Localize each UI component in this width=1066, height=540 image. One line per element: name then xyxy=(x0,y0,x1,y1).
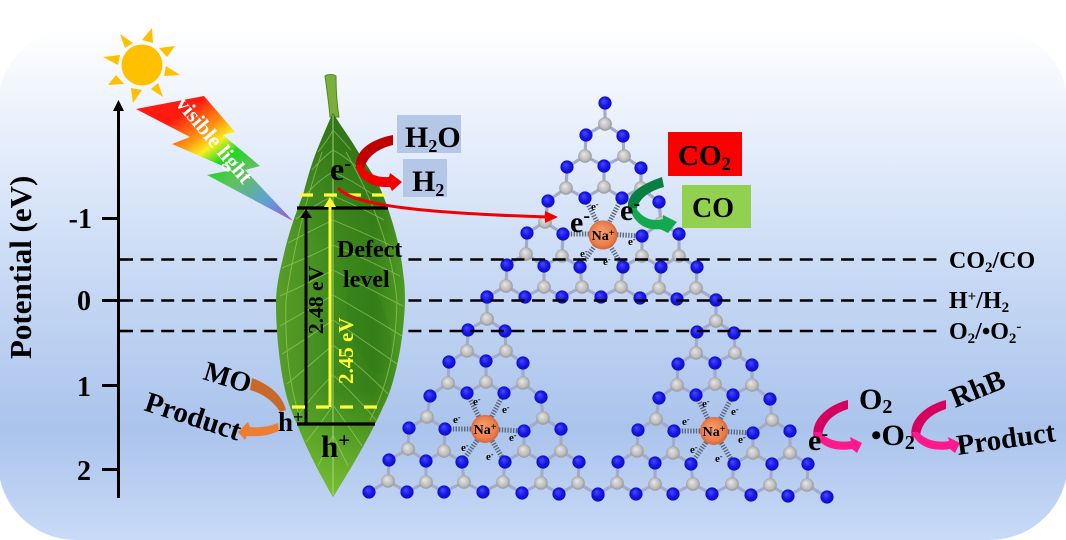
Na ion: top: - xyxy=(608,255,611,264)
Na ion: lower right: - xyxy=(707,397,710,406)
Na ion: lower right: - xyxy=(687,415,690,424)
RhB label: RhB xyxy=(946,364,1010,414)
defect level label: Defect xyxy=(337,237,402,263)
Na ion: lower right: e xyxy=(690,444,695,456)
Na ion: lower right xyxy=(682,397,746,465)
e- at conduction band: e xyxy=(330,151,344,187)
e- label left of Na: e xyxy=(570,206,583,239)
arrow: CO2 to CO xyxy=(628,177,677,233)
H2O box: H xyxy=(405,121,428,154)
axis: potential: 1 xyxy=(77,372,91,403)
level labels: /•O xyxy=(974,319,1009,345)
lattice: top triangle xyxy=(480,117,723,307)
Na ion: lower left: - xyxy=(478,395,481,404)
level labels: + xyxy=(968,289,976,305)
e- at conduction band: - xyxy=(344,151,351,175)
CO box xyxy=(682,185,751,228)
Na ion: lower right: e xyxy=(731,406,736,418)
Na ion: top: Na xyxy=(592,229,609,244)
level labels: CO xyxy=(949,248,985,274)
H2O box: 2 xyxy=(428,136,437,156)
Na ion: top: - xyxy=(633,235,636,244)
CO box: CO xyxy=(692,193,734,224)
Na ion: lower right: - xyxy=(736,405,739,414)
band gap lines on leaf: level xyxy=(343,267,390,293)
Na ion: top: e xyxy=(591,201,596,213)
product label left: Product xyxy=(141,386,246,447)
defect bottom dashed xyxy=(292,405,382,409)
product label right: Product xyxy=(955,416,1058,462)
Na ion: lower left: - xyxy=(491,450,494,459)
icon: sun xyxy=(103,28,180,103)
Na ion: lower left: - xyxy=(514,431,517,440)
axis: potential: 2 xyxy=(77,456,91,487)
Na ion: lower left: + xyxy=(491,422,497,433)
h+ small: h xyxy=(278,407,293,437)
level labels: 2 xyxy=(1009,331,1016,347)
lattice: bridge bonds and apex nitrogen xyxy=(480,96,723,328)
arrow: O2 to superoxide xyxy=(813,400,862,453)
CO2 box: CO xyxy=(678,140,722,172)
Na ion: lower left: - xyxy=(466,441,469,450)
arrow: RhB to product xyxy=(911,400,960,453)
conduction band line xyxy=(297,206,388,210)
Na ion: lower right: - xyxy=(695,443,698,452)
h+ large: + xyxy=(338,428,350,452)
Na ion: lower right: - xyxy=(720,452,723,461)
H2O box: O xyxy=(437,121,461,154)
superoxide label: 2 xyxy=(905,432,915,454)
level labels: H xyxy=(949,288,968,314)
CO2 box: 2 xyxy=(722,154,731,175)
H2 box: 2 xyxy=(435,180,444,200)
MO label: MO xyxy=(200,356,255,400)
level labels: 2 xyxy=(1002,300,1009,316)
Na ion: top: + xyxy=(609,228,615,239)
leaf xyxy=(276,74,405,497)
Na ion: lower left: - xyxy=(458,413,461,422)
O2 label: 2 xyxy=(882,396,892,418)
Na ion: lower right: e xyxy=(682,416,687,428)
axis: potential: -1 xyxy=(69,204,92,235)
e- right: e xyxy=(808,424,821,457)
valence band line xyxy=(297,422,375,426)
level labels: - xyxy=(1016,319,1021,335)
e- label left of Na: - xyxy=(583,205,590,227)
Na ion: top: - xyxy=(596,200,599,209)
2.48 eV label: 2.48 eV xyxy=(304,265,328,334)
2.48 eV arrow xyxy=(304,216,308,424)
Na ion: lower left: - xyxy=(507,403,510,412)
e- label right of Na: e xyxy=(620,194,633,227)
H2 box: H xyxy=(412,165,435,198)
O2 label: O xyxy=(859,383,882,416)
level labels: /H xyxy=(975,288,1002,314)
superoxide label: •O xyxy=(871,419,905,452)
H2 box xyxy=(403,159,447,200)
Na ion: lower left xyxy=(453,395,517,463)
Na ion: lower right: e xyxy=(702,398,707,410)
level labels: 2 xyxy=(968,331,975,347)
Na ion: lower right: - xyxy=(743,433,746,442)
level labels xyxy=(949,248,1035,347)
Na ion: top: e xyxy=(603,256,608,268)
Na ion: top: - xyxy=(585,247,588,256)
lattice: lower left triangle xyxy=(362,312,605,502)
icon: visible light rainbow bolt xyxy=(136,92,293,221)
Na ion: top: e xyxy=(628,236,633,248)
2.48 arrowhead xyxy=(300,209,312,218)
Na ion: lower left: e xyxy=(486,451,491,463)
defect top dashed xyxy=(300,193,388,197)
2.45 eV label: 2.45 eV xyxy=(334,318,358,384)
h+ small: + xyxy=(293,407,303,427)
dashed potential levels xyxy=(120,260,942,331)
Na ion: lower right: e xyxy=(738,434,743,446)
axis title: Potential (eV) xyxy=(3,176,38,359)
Na ion: lower right: Na xyxy=(703,425,720,440)
visible light label: visible light xyxy=(171,92,258,189)
Na ion: top: e xyxy=(580,248,585,260)
2.45 eV arrow xyxy=(328,205,332,407)
Na ion: lower left: e xyxy=(461,442,466,454)
h+ large: h xyxy=(321,429,338,464)
arrow: electron transfer to lattice xyxy=(338,188,558,223)
Na ion: lower left: Na xyxy=(474,423,491,438)
band gap lines on leaf xyxy=(292,195,402,424)
e- right: - xyxy=(821,423,828,445)
Na ion: lower left: e xyxy=(502,404,507,416)
Na ion: lower right: e xyxy=(715,453,720,465)
e- label right of Na: - xyxy=(633,193,640,215)
2.45 arrowhead xyxy=(324,197,336,207)
level labels: O xyxy=(949,319,968,345)
level labels: /CO xyxy=(992,248,1035,274)
Na ion: lower left: e xyxy=(453,414,458,426)
arrow: H2O to H2 xyxy=(356,135,402,191)
axis: potential: 0 xyxy=(77,286,91,317)
Na ion: lower right: + xyxy=(720,424,726,435)
axis: potential xyxy=(3,100,124,498)
H2O box xyxy=(397,115,461,156)
Na ion: lower left: e xyxy=(473,396,478,408)
level labels: 2 xyxy=(985,260,992,276)
Na ion: lower left: e xyxy=(509,432,514,444)
arrow: MO to product xyxy=(238,378,286,440)
CO2 box xyxy=(668,132,742,176)
Na ion: top xyxy=(580,200,636,268)
lattice: lower right triangle xyxy=(591,314,834,504)
